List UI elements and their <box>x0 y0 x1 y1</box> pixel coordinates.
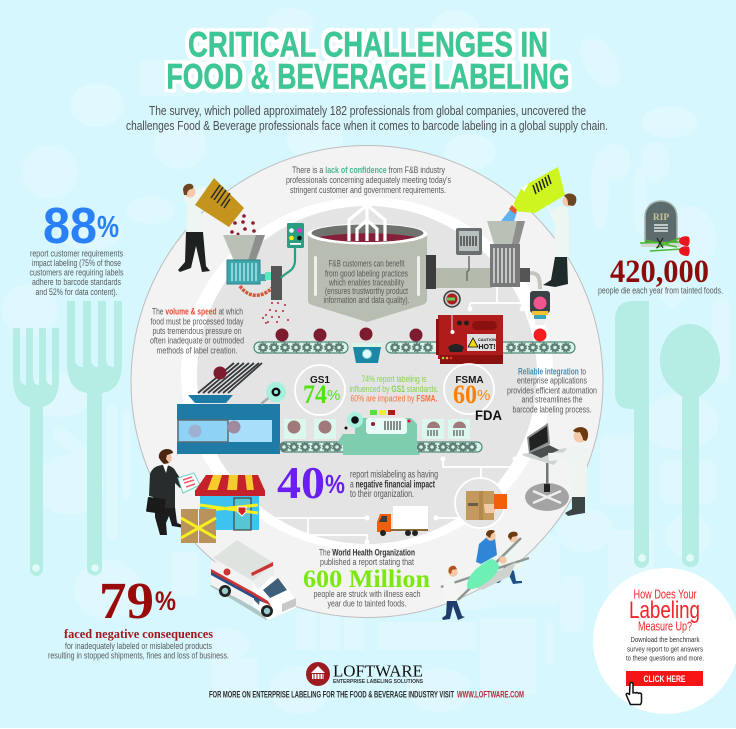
red hot machine: CAUTION <box>478 337 496 342</box>
reliable integration text: barcode labeling process. <box>512 404 592 416</box>
ambulance <box>210 540 296 620</box>
labeling machine <box>337 410 420 455</box>
79 percent <box>99 573 176 630</box>
FSMA circle: 60 <box>453 380 477 409</box>
call to action circle: Download the benchmark <box>630 635 700 644</box>
lower machine wheel <box>261 382 286 404</box>
40 percent <box>277 457 345 508</box>
stretcher scene <box>441 530 529 620</box>
cutlery: left small fork <box>13 328 59 576</box>
vat text: which enables traceability <box>328 278 404 288</box>
cutlery: left large fork <box>67 301 122 576</box>
88 percent text: and 52% for data content). <box>36 287 118 298</box>
reliable integration text: provides efficient automation <box>507 386 597 396</box>
vat text: (ensures trustworthy product <box>325 286 408 297</box>
consequences text: resulting in stopped shipments, fines and loss of business. <box>48 650 229 662</box>
vat text: F&B customers can benefit <box>328 258 405 270</box>
consequences text <box>48 627 229 662</box>
volume and speed text: often inadequate or outmoded <box>150 336 244 346</box>
cutlery holes <box>32 554 694 572</box>
main circle panel <box>131 146 603 618</box>
dispenser device <box>530 291 550 325</box>
call to action circle: CLICK HERE <box>644 674 686 685</box>
vat pipes <box>349 199 385 241</box>
reliable integration text <box>507 366 597 416</box>
icon: RIP gravestone: RIP <box>653 213 669 223</box>
financial impact text: to their organization. <box>350 489 414 500</box>
control panel <box>281 223 304 278</box>
call to action circle: How Does Your <box>634 588 696 602</box>
icon: RIP gravestone <box>640 201 690 256</box>
FSMA circle <box>444 364 494 414</box>
title: FOOD & BEVERAGE LABELING <box>166 58 570 96</box>
WHO text: published a report stating that <box>320 557 414 568</box>
88 percent text: impact labeling (75% of those <box>32 258 121 269</box>
79 percent: 79 <box>99 573 154 630</box>
influence text <box>350 374 438 404</box>
reliable integration text: enterprise applications <box>517 376 587 386</box>
79 percent: % <box>155 586 176 616</box>
red falling dots <box>230 214 256 236</box>
lower machine belt <box>197 363 263 393</box>
machine: hopper and extruder <box>223 235 282 300</box>
top confidence text <box>286 165 451 196</box>
call to action circle <box>593 568 736 714</box>
red particles under extruder <box>262 302 289 324</box>
consequences text: faced negative consequences <box>64 627 213 641</box>
top confidence text: professionals concerning adequately meeting today's <box>286 175 451 186</box>
Loftware logo <box>306 662 424 686</box>
volume and speed text <box>150 306 244 356</box>
WHO text <box>303 548 430 610</box>
intro text: The survey, which polled approximately 182 professionals from global companies, uncovered the <box>149 103 586 118</box>
icon: hand cursor <box>626 682 642 704</box>
GS1 circle: 74 <box>303 380 327 409</box>
vat text <box>324 258 410 306</box>
influence text: 74% report labeling is <box>362 374 427 385</box>
volume and speed text: puts tremendous pressure on <box>152 326 242 337</box>
88 percent: 88 <box>43 197 97 254</box>
88 percent text: adhere to barcode standards <box>32 277 121 288</box>
WHO text: year due to tainted foods. <box>328 598 406 610</box>
88 percent: % <box>97 209 119 244</box>
cardboard boxes <box>181 509 216 543</box>
volume and speed text: food must be processed today <box>150 316 244 328</box>
bottom edge <box>0 728 736 729</box>
store <box>195 475 265 530</box>
barcode monitor <box>456 228 482 255</box>
person at laptop <box>522 423 588 516</box>
GS1 circle <box>295 365 345 415</box>
boxes on conveyor <box>284 419 470 439</box>
WHO text: people are struck with illness each <box>314 589 420 600</box>
vat text: information and data quality). <box>324 295 410 306</box>
icon: person pouring bag <box>178 178 244 272</box>
red ball <box>534 328 546 342</box>
box with hand circle <box>455 478 507 528</box>
88 percent text <box>30 248 124 298</box>
cutlery: right knife <box>615 301 649 568</box>
Loftware logo: LOFTWARE <box>333 662 423 680</box>
40 percent: % <box>325 469 345 499</box>
cutlery: right spoon <box>660 324 720 567</box>
intro text: challenges Food & Beverage professionals face when it comes to barcode labeling in a global supply chain. <box>126 118 608 133</box>
scale <box>351 343 383 363</box>
title: CRITICAL CHALLENGES IN <box>188 26 548 64</box>
vat text: from good labeling practices <box>325 268 408 280</box>
FSMA circle: FSMA <box>455 375 484 386</box>
vat <box>308 224 428 322</box>
call to action circle: to these questions and more. <box>626 654 704 662</box>
circuit lines <box>266 287 524 544</box>
call to action circle: Labeling <box>629 597 700 624</box>
yellow bottle and person <box>501 167 576 287</box>
financial impact text: a negative financial impact <box>350 480 435 490</box>
financial impact text: report mislabeling as having <box>350 470 438 480</box>
red hot machine: HOT! <box>478 344 496 351</box>
financial impact text <box>350 470 438 500</box>
volume and speed text: methods of label creation. <box>156 346 238 356</box>
call to action circle: Measure Up? <box>638 620 692 634</box>
Loftware logo: ENTERPRISE LABELING SOLUTIONS <box>333 679 424 685</box>
top confidence text: stringent customer and government requirements. <box>290 185 446 196</box>
call to action circle: survey report to get answers <box>627 644 703 654</box>
88 percent text: report customer requirements <box>30 248 123 260</box>
red balls on conveyor <box>276 328 422 342</box>
right machine <box>487 221 540 289</box>
red hot machine <box>436 291 503 364</box>
GS1 circle: GS1 <box>310 375 330 386</box>
420,000 stat: 420,000 <box>610 254 709 290</box>
WHO text: 600 Million <box>303 566 430 593</box>
88 percent text: customers are requiring labels <box>30 268 124 278</box>
FDA logo: FDA <box>475 407 502 423</box>
title <box>166 26 570 96</box>
FSMA circle: % <box>477 387 490 404</box>
footer line: WWW.LOFTWARE.COM <box>457 690 524 700</box>
conveyor 3 <box>280 442 482 452</box>
conveyor 2 <box>386 342 575 353</box>
consequences text: for inadequately labeled or mislabeled products <box>65 641 212 652</box>
reliable integration text: Reliable integration to <box>518 366 586 378</box>
volume and speed text: The volume & speed at which <box>152 306 243 318</box>
pipe to right machine <box>426 255 492 289</box>
top confidence text: There is a lack of confidence from F&B industry <box>292 165 445 176</box>
lower blue machine <box>177 395 280 454</box>
conveyor 1 <box>254 342 348 353</box>
influence text: influenced by GS1 standards. <box>350 384 438 395</box>
influence text: 60% are impacted by FSMA. <box>350 394 438 404</box>
GS1 circle: % <box>327 387 340 404</box>
footer line: FOR MORE ON ENTERPRISE LABELING FOR THE FOOD & BEVERAGE INDUSTRY VISIT <box>209 690 454 700</box>
businessman <box>146 449 200 535</box>
WHO text: The World Health Organization <box>319 548 415 558</box>
truck <box>377 506 428 536</box>
reliable integration text: and streamlines the <box>522 394 582 406</box>
40 percent: 40 <box>277 457 325 508</box>
intro text <box>126 103 608 133</box>
